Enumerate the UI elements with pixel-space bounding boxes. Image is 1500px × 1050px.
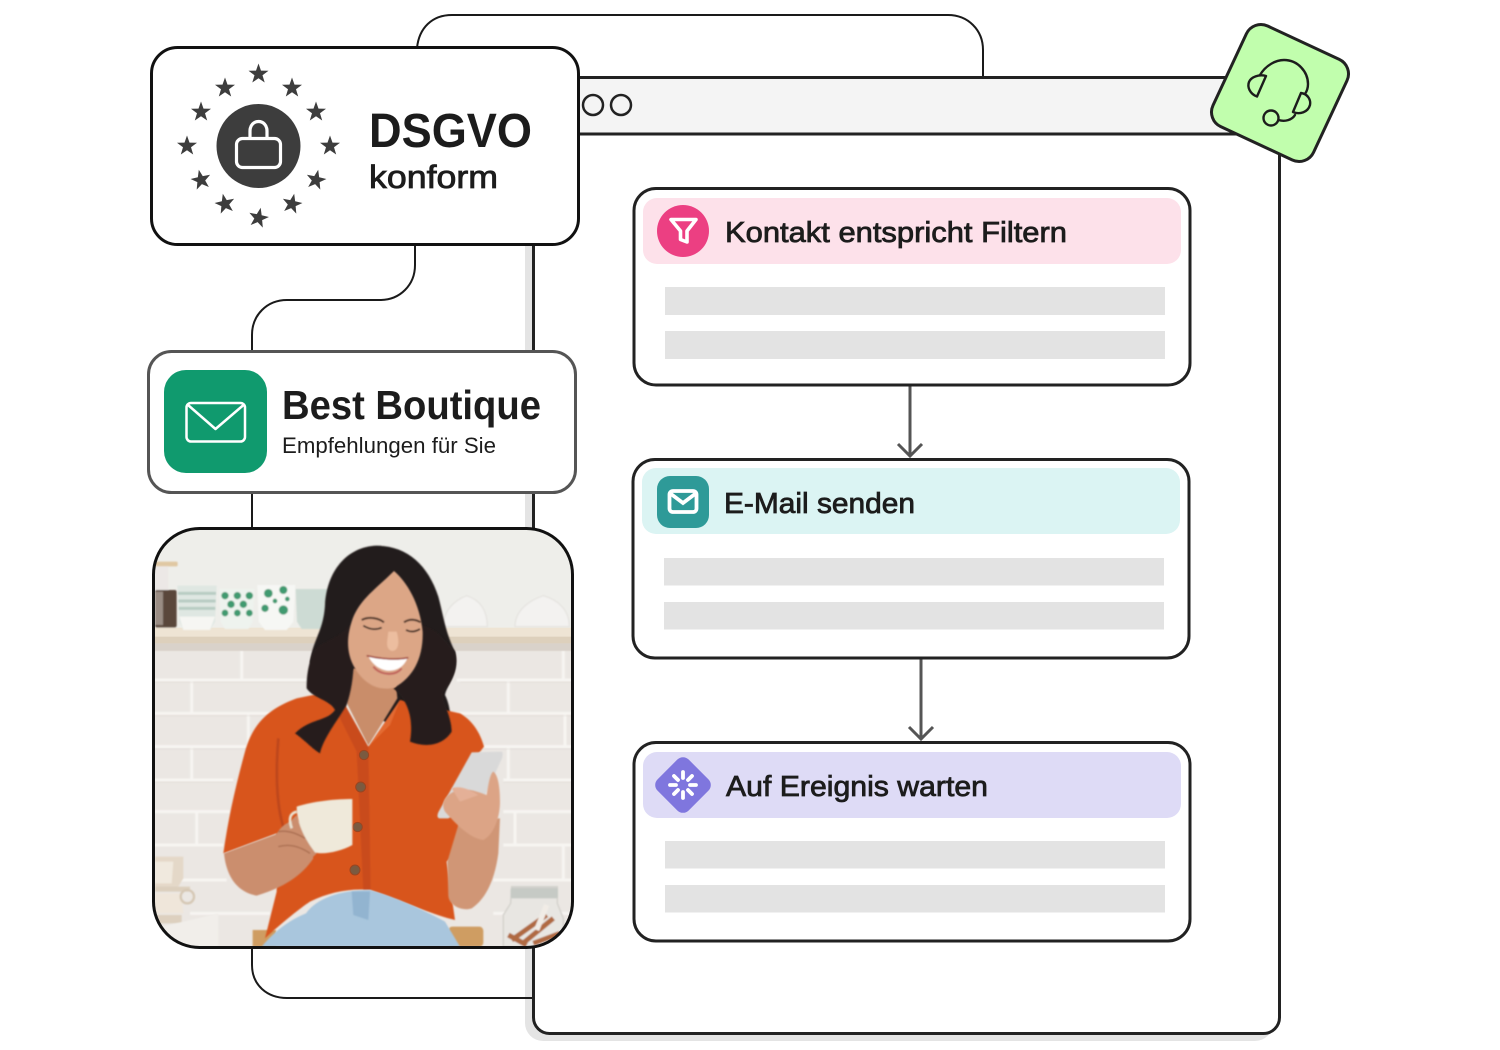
phone hand	[443, 772, 500, 840]
arrow: email to wait	[909, 658, 933, 739]
heading: E-Mail senden: E-Mail senden	[724, 488, 915, 520]
browser window	[534, 78, 1280, 1034]
workflow card: E-Mail senden	[633, 460, 1189, 658]
heading: Kontakt entspricht Filtern: Kontakt entspricht Filtern	[725, 217, 1067, 249]
heading: Auf Ereignis warten: Auf Ereignis warten	[726, 771, 988, 803]
photo: smiling woman with coffee and phone	[150, 525, 580, 955]
shelf	[150, 628, 580, 651]
front hair locks	[294, 648, 458, 754]
hair back	[310, 546, 456, 746]
smartphone	[437, 752, 503, 818]
brick wall	[150, 642, 580, 955]
right arm	[447, 818, 500, 909]
workflow card: Kontakt entspricht Filtern	[634, 188, 1190, 385]
left arm	[224, 815, 313, 896]
connector lines between cards	[252, 15, 983, 998]
cups on shelf	[177, 585, 328, 630]
support badge with headset icon	[1206, 19, 1354, 167]
jar on shelf	[155, 562, 178, 627]
stacked cups lower left	[155, 857, 194, 923]
icon: EU stars ring with lock	[177, 64, 340, 228]
lower left white box	[174, 922, 182, 924]
face	[348, 571, 423, 689]
arrow: filter to email	[898, 385, 922, 456]
icon: funnel	[657, 205, 709, 257]
heading: DSGVO: DSGVO	[369, 105, 532, 158]
heading: Best Boutique: Best Boutique	[282, 382, 541, 428]
window title bar	[534, 78, 1280, 134]
icon: loading diamond	[652, 754, 714, 816]
email notification card: Best Boutique	[148, 352, 576, 492]
cinnamon jar	[503, 887, 563, 947]
neck	[341, 668, 397, 746]
blouse buttons	[350, 750, 369, 875]
glass domes	[443, 596, 569, 627]
window drop shadow	[525, 100, 1273, 1041]
upper wall	[155, 530, 571, 628]
DSGVO compliance card	[152, 48, 578, 244]
subheading: konform: konform	[369, 159, 498, 195]
icon: green mail app	[164, 370, 267, 473]
icon: email	[657, 476, 709, 528]
jeans	[262, 890, 460, 947]
subheading: Empfehlungen für Sie: Empfehlungen für Sie	[282, 433, 496, 458]
workflow card: Auf Ereignis warten	[634, 742, 1190, 941]
mug and holding hand	[276, 799, 352, 863]
stool	[253, 927, 483, 947]
icon: headset	[1248, 60, 1310, 126]
orange blouse	[223, 690, 484, 938]
